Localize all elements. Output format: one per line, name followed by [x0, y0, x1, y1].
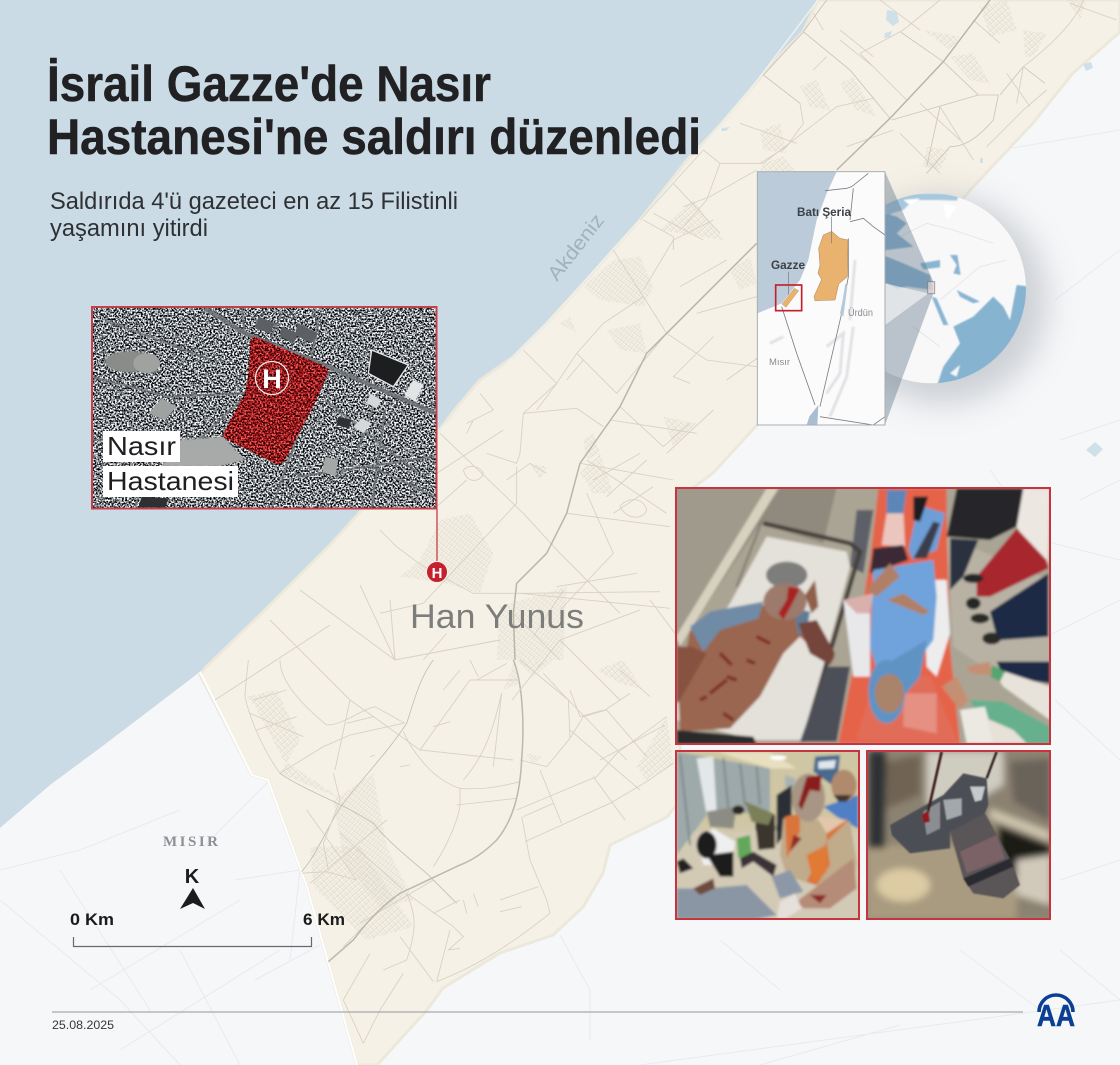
- bystanders: [947, 488, 1027, 540]
- subtitle: yaşamını yitirdi: [50, 215, 208, 242]
- location marker on globe: [928, 282, 935, 294]
- subtitle: [50, 188, 458, 242]
- globe shadow: [839, 196, 1047, 404]
- globe: [886, 194, 1026, 384]
- scale bar: 6 Km: [303, 910, 345, 929]
- extra western roads: [215, 585, 680, 790]
- satellite panel: Nasır Hospital: [85, 300, 443, 515]
- sea label: Akdeniz: Akdeniz: [544, 210, 609, 285]
- title: Hastanesi'ne saldırı düzenledi: [47, 109, 701, 165]
- scale bar: 0 Km: [70, 910, 114, 929]
- locator: globe and inset: [757, 172, 1033, 425]
- projection cone: [885, 172, 933, 425]
- West Bank: [814, 231, 848, 301]
- north arrow: K: [185, 866, 200, 888]
- streets and open areas: [205, 308, 436, 413]
- inset labels: Batı Şeria: [797, 207, 852, 219]
- logo: AA: AA: [1037, 998, 1075, 1033]
- stretcher left: [677, 537, 850, 740]
- photo: wounded paramedic: [675, 751, 860, 920]
- label: Nasır Hastanesi: Nasır: [107, 431, 176, 461]
- footer rule: [52, 1011, 1023, 1013]
- title: [47, 56, 701, 165]
- subtitle: Saldırıda 4'ü gazeteci en az 15 Filistinli: [50, 188, 458, 215]
- hospital H marker: [256, 362, 288, 394]
- inset labels: Mısır: [769, 357, 790, 368]
- ponds: [721, 10, 1103, 457]
- inset labels: Ürdün: [848, 307, 873, 319]
- leader line and hospital pin: [426, 509, 448, 582]
- label: Nasır Hastanesi: Hastanesi: [107, 466, 234, 496]
- hospital highlight: [222, 337, 328, 464]
- inset labels: [769, 207, 873, 368]
- date: 25.08.2025: [52, 1020, 114, 1032]
- man: [678, 605, 835, 732]
- inset labels: Gazze: [771, 260, 805, 272]
- photo: injured on stretchers: [675, 487, 1051, 745]
- scale bar: [70, 910, 345, 946]
- Gaza: [782, 288, 799, 307]
- north arrow: [180, 866, 205, 909]
- label: Nasır Hastanesi: [103, 431, 238, 497]
- city label: Han Yunus: Han Yunus: [410, 598, 584, 636]
- photo: damaged camera: [866, 751, 1051, 920]
- Gaza red marker: [776, 285, 802, 311]
- stretcher right: [838, 488, 960, 743]
- sea: [0, 0, 818, 828]
- leader line and hospital pin: H: [432, 565, 442, 582]
- title: İsrail Gazze'de Nasır: [47, 56, 491, 112]
- country label: MISIR: MISIR: [163, 834, 218, 850]
- inset map: [757, 172, 885, 425]
- road network: [215, 0, 1117, 1043]
- hospital H marker: H: [262, 364, 282, 394]
